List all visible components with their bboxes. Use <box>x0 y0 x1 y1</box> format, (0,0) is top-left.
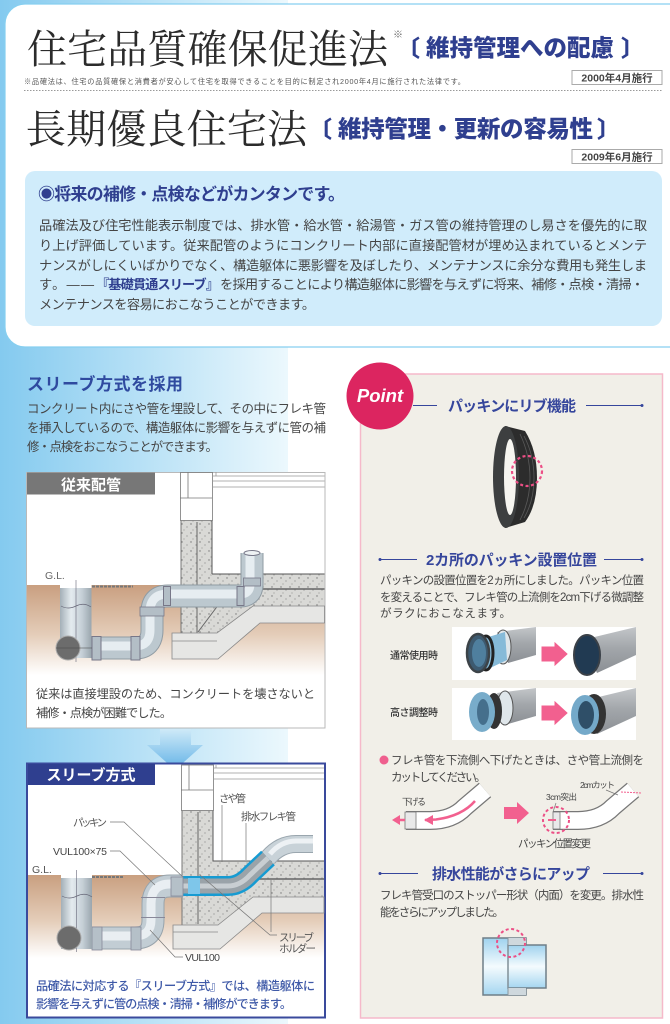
tag: 従来配管 <box>61 476 121 494</box>
note: cut the sleeve: フレキ管を下流側へ下げたときは、さや管上流側を <box>391 753 644 767</box>
building structure <box>172 472 324 659</box>
text: drainage: 能をさらにアップしました。 <box>380 905 504 919</box>
panel: point <box>346 362 662 1018</box>
caption: 従来は直接埋設のため、コンクリートを壊さないと <box>36 686 315 701</box>
body text <box>39 218 647 312</box>
ground hatch <box>92 586 133 588</box>
diagram: lowered flexible pipe <box>392 790 485 829</box>
diagram: changed packing position: 2cmカット <box>580 780 615 790</box>
title: housing quality law: 住宅品質確保促進法 <box>27 27 389 72</box>
caption: 品確法に対応する『スリーブ方式』では、構造躯体に <box>36 978 315 993</box>
callout labels and leaders: さや管 <box>219 792 246 805</box>
caption <box>36 686 315 720</box>
label: G.L.: G.L. <box>45 570 65 582</box>
text: packing positions: を変えることで、フレキ管の上流側を2cm下げる微調整 <box>380 590 644 604</box>
panel: law summary <box>5 4 670 347</box>
text: packing positions <box>380 573 644 620</box>
footnote: ※品確法は、住宅の品質確保と消費者が安心して住宅を取得できることを目的に制定され2000年4月に施行された法律です。 <box>24 77 465 86</box>
diagram: pipe fitting <box>483 929 546 995</box>
diagram: changed packing position <box>518 780 642 850</box>
callout labels and leaders <box>32 792 316 964</box>
row: height adjustment: 高さ調整時 <box>390 706 438 719</box>
manhole <box>56 580 92 662</box>
title: long-life housing law: 長期優良住宅法 <box>26 107 308 152</box>
tag <box>27 472 155 494</box>
heading: two packing positions <box>378 552 644 569</box>
text: drainage: フレキ管受口のストッパー形状（内面）を変更。排水性 <box>380 888 644 902</box>
caption: 補修・点検が困難でした。 <box>36 705 172 720</box>
diagram: changed packing position: パッキン位置変更 <box>518 837 592 850</box>
soil <box>27 585 324 675</box>
callout labels and leaders: 排水フレキ管 <box>241 810 296 823</box>
panel: easy repair and inspection <box>25 171 662 326</box>
heading: packing rib <box>413 397 644 415</box>
building structure <box>173 765 324 949</box>
flexible pipe in sleeve <box>183 841 313 894</box>
heading: ◉将来の補修・点検などがカンタンです。 <box>38 184 345 204</box>
body text: 『基礎貫通スリーブ』 <box>96 276 219 292</box>
callout labels and leaders: G.L. <box>32 864 52 876</box>
text: packing positions: パッキンの設置位置を2ヵ所にしました。パッキン位置 <box>380 573 644 587</box>
note: cut the sleeve <box>380 753 644 784</box>
body text: ナンスがしにくいばかりでなく、構造躯体に悪影響を及ぼしたり、メンテナンスに余分な費用も発生しま <box>39 258 647 273</box>
subtitle: maintenance consideration: 維持管理への配慮 <box>426 34 614 61</box>
heading: packing rib: パッキンにリブ機能 <box>448 397 576 415</box>
tag: スリーブ方式 <box>46 766 136 784</box>
row: normal use: 通常使用時 <box>390 649 438 662</box>
badge: Point <box>346 362 414 430</box>
panel: sleeve method <box>27 764 325 1018</box>
callout labels and leaders: スリーブ <box>279 931 314 944</box>
callout labels and leaders: パッキン <box>73 817 107 829</box>
caption: 影響を与えずに管の点検・清掃・補修ができます。 <box>36 996 292 1011</box>
heading: better drainage: 排水性能がさらにアップ <box>432 865 590 883</box>
body text: り上げ評価しています。従来配管のようにコンクリート内部に直接配管材が埋め込まれているとメンテ <box>39 238 647 253</box>
callout labels and leaders: VUL100 <box>185 952 220 964</box>
body text: す。―― <box>39 277 95 292</box>
text: packing positions: がラクにおこなえます。 <box>380 606 511 620</box>
panel: conventional piping <box>26 472 325 728</box>
note: cut the sleeve: カットしてください。 <box>391 771 486 784</box>
soil <box>28 875 324 958</box>
row: height adjustment <box>390 688 636 740</box>
badge: 2009 <box>572 150 662 164</box>
subtitle: maintenance consideration: 〕 <box>621 35 644 61</box>
body text <box>27 401 326 454</box>
subtitle: ease of maintenance and renewal: 維持管理・更新の容易性 <box>338 115 593 142</box>
row: normal use <box>390 627 636 680</box>
badge: 2009: 2009年6月施行 <box>581 150 653 164</box>
subtitle: ease of maintenance and renewal: 〕 <box>597 116 620 142</box>
drain pipe <box>92 877 183 950</box>
heading: two packing positions: 2カ所のパッキン設置位置 <box>426 552 597 569</box>
callout labels and leaders: VUL100×75 <box>53 846 107 858</box>
heading: better drainage <box>378 865 644 883</box>
subtitle: ease of maintenance and renewal: 〔 <box>309 116 332 142</box>
heading: スリーブ方式を採用 <box>27 374 183 394</box>
arrow: pink <box>504 802 529 824</box>
title: housing quality law: ※ <box>393 30 403 41</box>
diagram: changed packing position: 3cm突出 <box>546 792 577 802</box>
body text: を採用することにより構造躯体に影響を与えずに将来、補修・点検・清掃・ <box>220 277 644 292</box>
diagram: lowered flexible pipe: 下げる <box>402 797 426 807</box>
badge: 2000 <box>572 70 662 84</box>
arrow: down to sleeve method <box>147 729 203 770</box>
badge: 2000: 2000年4月施行 <box>581 72 653 84</box>
section: sleeve method intro <box>27 374 326 454</box>
body text: を挿入しているので、構造躯体に影響を与えずに管の補 <box>27 420 326 435</box>
icon: packing ring <box>493 426 542 528</box>
body text: 品確法及び住宅性能表示制度では、排水管・給水管・給湯管・ガス管の維持管理のし易さを優先的に取 <box>39 218 647 233</box>
callout labels and leaders: ホルダー <box>279 942 316 955</box>
tag <box>28 764 155 785</box>
body text: コンクリート内にさや管を埋設して、その中にフレキ管 <box>27 401 326 416</box>
body text: 修・点検をおこなうことができます。 <box>27 439 218 454</box>
body text: メンテナンスを容易におこなうことができます。 <box>39 296 315 312</box>
subtitle: maintenance consideration: 〔 <box>397 35 420 61</box>
text: drainage <box>380 888 644 919</box>
pipe run <box>92 550 260 660</box>
caption <box>36 978 315 1011</box>
badge: Point: Point <box>357 385 404 406</box>
manhole <box>57 870 92 952</box>
